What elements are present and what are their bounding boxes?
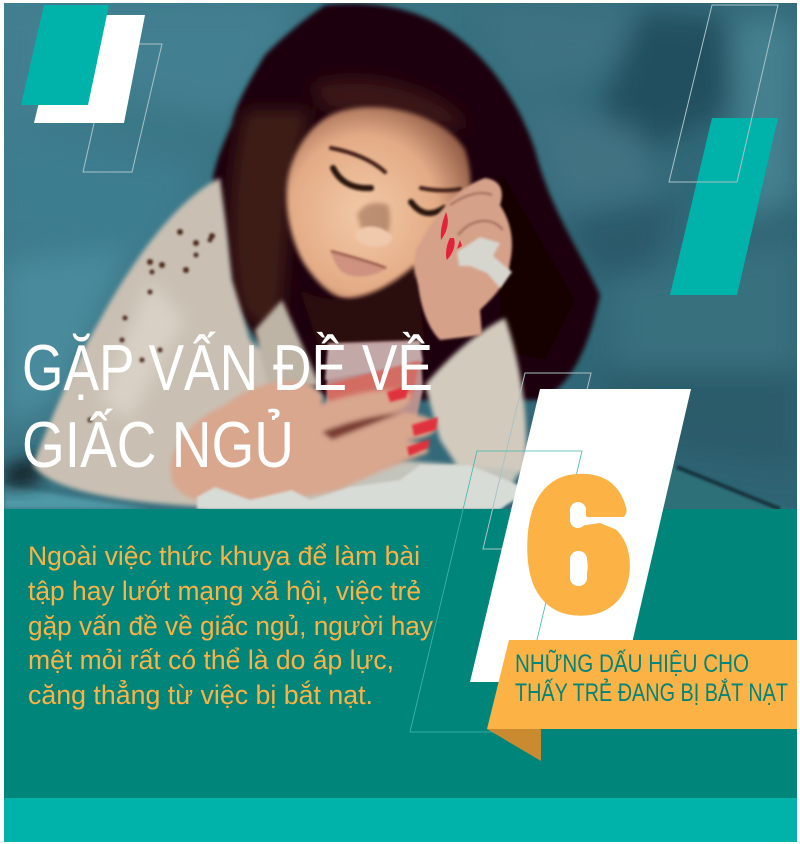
sweater: [33, 178, 526, 509]
top-left accent shapes: [21, 5, 162, 172]
holding hand: [171, 381, 438, 502]
red nails: [387, 385, 438, 456]
hair: [213, 4, 600, 400]
lower band: [4, 509, 797, 799]
tissues on the bed: [197, 465, 530, 509]
body text: Ngoài việc thức khuya để làm bài: [28, 541, 420, 571]
big number 6: 6: [530, 448, 627, 643]
eyes and brows: [331, 148, 460, 213]
body text: gặp vấn đề về giấc ngủ, người hay: [28, 611, 433, 641]
top-right accent shapes: [669, 5, 778, 295]
title: GẶP VẤN ĐỀ VỀ: [22, 331, 433, 404]
ribbon: NHỮNG DẤU HIỆU CHO: [515, 649, 749, 678]
body text: mệt mỏi rất có thể là do áp lực,: [28, 645, 394, 675]
mouth: [331, 251, 386, 277]
body text: căng thẳng từ việc bị bắt nạt.: [28, 678, 373, 710]
title: [22, 331, 433, 481]
number badge: [410, 373, 691, 732]
hand with tissue: [415, 178, 512, 340]
body text: [28, 541, 433, 710]
footer band: [4, 798, 797, 842]
body text: tập hay lướt mạng xã hội, việc trẻ: [28, 576, 421, 606]
neck shadow: [300, 265, 425, 350]
face: [286, 107, 471, 301]
title: GIẤC NGỦ: [22, 408, 294, 481]
ribbon: [487, 640, 797, 761]
phone: [323, 338, 424, 418]
sweater knit holes: [88, 229, 215, 422]
tissue: [457, 237, 512, 288]
photo: girl using a phone under a blanket: [4, 3, 797, 520]
